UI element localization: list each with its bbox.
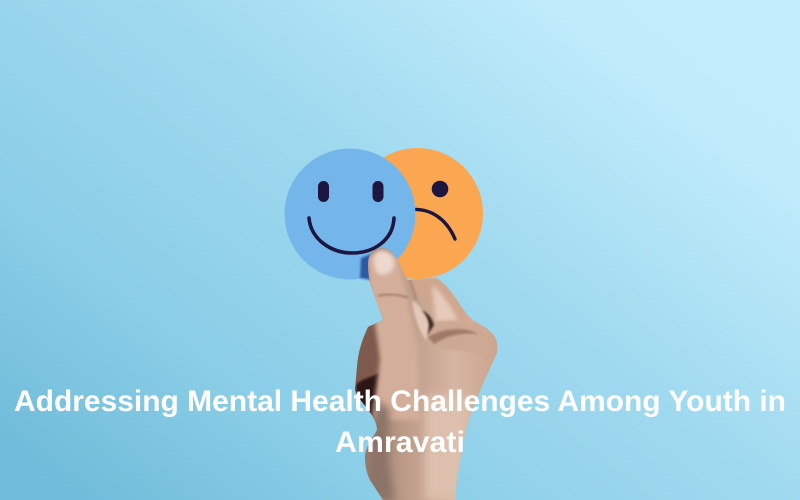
title (14, 385, 786, 459)
title: Amravati (335, 426, 465, 459)
title: Addressing Mental Health Challenges Among Youth in (14, 385, 786, 418)
hand holding cards (350, 245, 500, 500)
sad face card (352, 148, 483, 279)
happy face card (284, 148, 416, 280)
